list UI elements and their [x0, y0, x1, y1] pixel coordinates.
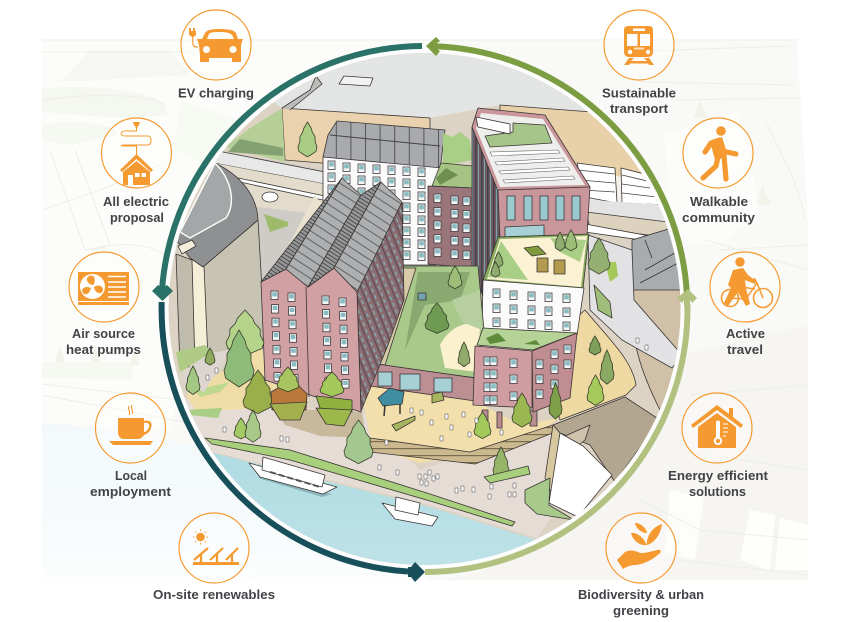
- building: main pink block with twin gables: [261, 178, 404, 412]
- arrowhead: right: [677, 289, 697, 307]
- feature: local employment: employment: [90, 485, 172, 499]
- building: foreground brown and white block: [525, 397, 660, 520]
- trees: [186, 122, 614, 483]
- label: all electric proposal: All electric: [103, 195, 169, 209]
- label: energy efficient solutions: Energy efficient: [668, 469, 769, 483]
- kiosk and seating: [378, 388, 444, 431]
- label: on-site renewables: On-site renewables: [153, 588, 275, 602]
- arrowhead: top: [426, 37, 440, 56]
- icon: train: [624, 26, 654, 65]
- icon: person walking a bicycle: [722, 257, 772, 308]
- label: biodiversity and urban greening: Biodiversity & urban: [578, 588, 704, 602]
- ground: grey roof and tan walls at the rear: [214, 53, 650, 350]
- illustrated development scene: [168, 53, 680, 565]
- ring arc: mid green: [436, 46, 687, 296]
- building: left cylindrical tower: [176, 163, 265, 392]
- promenade: [180, 398, 560, 538]
- feature: energy efficient solutions: [668, 393, 769, 499]
- label: local employment: Local: [115, 469, 147, 483]
- label: active travel: Active: [726, 327, 765, 341]
- riverside green strip: [205, 438, 515, 526]
- feature: walkable community: [682, 118, 755, 225]
- icon: walking person: [703, 126, 736, 179]
- feature: sustainable transport: transport: [610, 102, 669, 116]
- feature: local employment: [90, 393, 172, 499]
- label: sustainable transport: Sustainable: [602, 86, 676, 100]
- building: podium: [370, 363, 475, 401]
- feature: on-site renewables: [153, 513, 275, 602]
- icon: plugged house: [120, 122, 153, 185]
- arrowhead: left: [152, 285, 173, 301]
- building: white block with grey roof: [323, 121, 445, 265]
- people: [206, 338, 648, 499]
- courtyard garden: [372, 266, 484, 378]
- feature: sustainable transport: [602, 10, 676, 116]
- arrowhead: bottom: [408, 562, 425, 582]
- label: air source heat pumps: Air source: [72, 327, 135, 341]
- icon: house with thermometer: [691, 405, 743, 448]
- feature: EV charging: [178, 10, 254, 100]
- feature: biodiversity and urban greening: [578, 513, 704, 618]
- icon: hand holding leaves: [617, 523, 662, 569]
- ring arc: light green: [425, 304, 687, 572]
- feature: all electric proposal: proposal: [110, 211, 164, 225]
- ground: right side parking and paths: [558, 162, 680, 420]
- feature: energy efficient solutions: solutions: [689, 485, 746, 499]
- sandy areas and plaza: [186, 345, 560, 464]
- feature: active travel: [710, 252, 780, 357]
- label: EV charging: EV charging: [178, 86, 254, 100]
- boats: [249, 457, 438, 526]
- river: [212, 452, 536, 565]
- building: white block below terrace: [482, 280, 584, 335]
- icon: electric car: [189, 28, 243, 62]
- ring arc: dark teal: [162, 302, 408, 572]
- building: tall pink block with roof terrace: [472, 108, 590, 300]
- icon: heat pump unit: [78, 272, 129, 305]
- building: maroon mid block: [428, 132, 474, 268]
- label: walkable community: Walkable: [690, 195, 748, 209]
- icon: sun and solar panels: [193, 530, 239, 565]
- building: pink corner block: [473, 328, 577, 428]
- feature: air source heat pumps: heat pumps: [66, 343, 141, 357]
- background: faded site plan: [42, 40, 808, 580]
- ring arc: dark green: [162, 46, 422, 290]
- feature: walkable community: community: [682, 211, 755, 225]
- feature: active travel: travel: [727, 343, 763, 357]
- progress ring: [152, 37, 697, 582]
- feature: biodiversity and urban greening: greening: [613, 604, 669, 618]
- feature: all electric proposal: [102, 118, 172, 225]
- feature: air source heat pumps: [66, 252, 141, 357]
- icon: coffee cup: [109, 405, 153, 445]
